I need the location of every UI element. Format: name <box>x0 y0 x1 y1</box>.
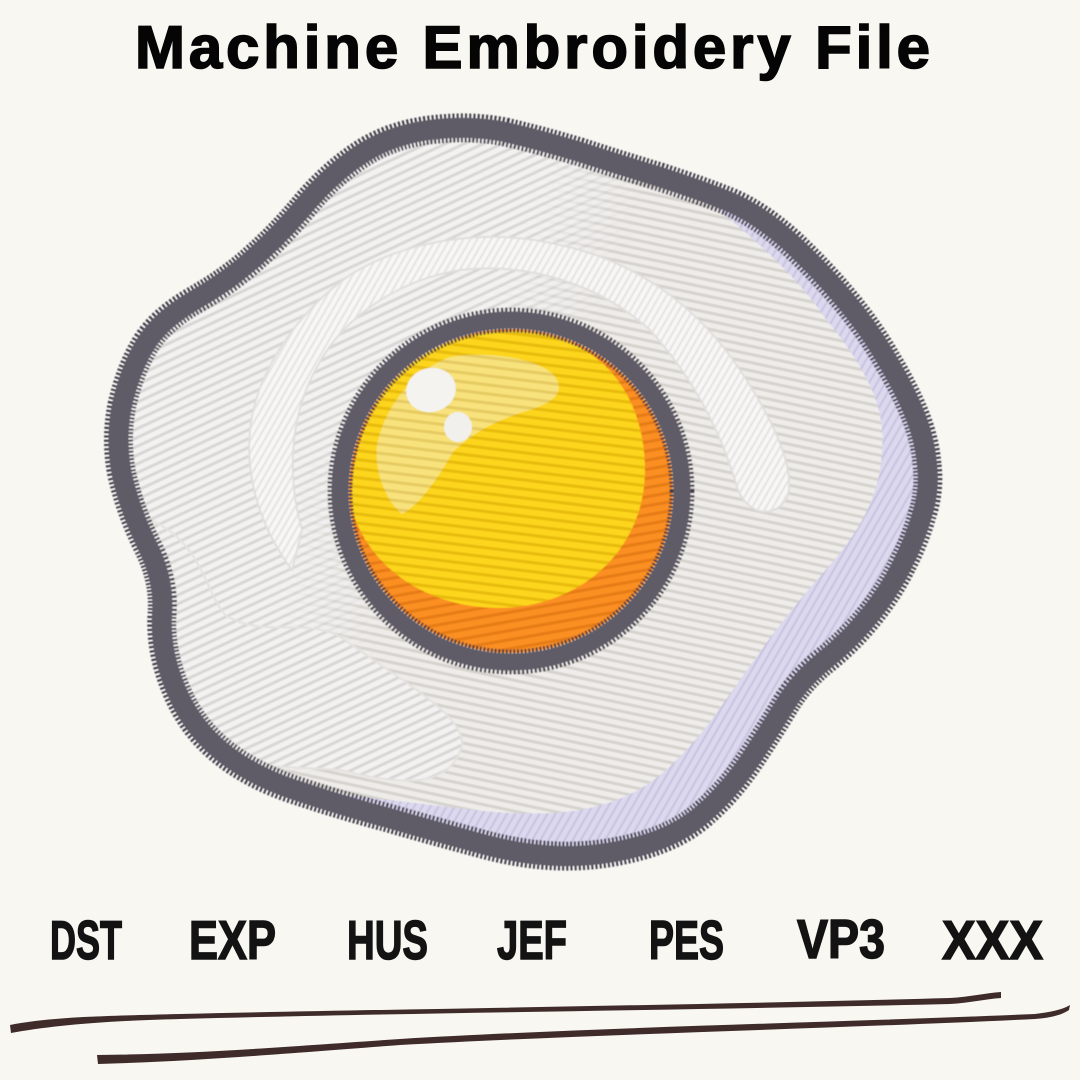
label: EXP: EXP <box>189 909 276 971</box>
ridge: lower left fold <box>150 520 462 781</box>
yolk: white shine large <box>401 362 461 418</box>
label: JEF: JEF <box>497 909 567 971</box>
ridge: arc around yolk <box>249 237 789 570</box>
illustration: embroidered fried egg <box>118 128 928 856</box>
yolk <box>340 320 682 662</box>
yolk: white shine small <box>444 412 472 442</box>
yolk: pale highlight <box>377 355 559 514</box>
label: PES: PES <box>649 909 724 971</box>
egg white <box>118 128 883 813</box>
yolk: yellow centre <box>351 331 645 608</box>
egg outline: stitched grey border <box>118 128 928 856</box>
underline stroke one <box>10 992 1001 1033</box>
yolk: stitched grey ring <box>340 320 682 662</box>
label: HUS: HUS <box>347 909 428 971</box>
underline stroke two <box>97 1005 1070 1064</box>
file format labels <box>50 908 1043 971</box>
label: XXX: XXX <box>942 909 1043 971</box>
yolk: orange shade <box>349 329 673 653</box>
title: Machine Embroidery File <box>135 14 930 81</box>
egg white: upper left stitching <box>128 138 612 771</box>
label: DST: DST <box>50 909 122 971</box>
egg shadow: lilac underlay <box>118 128 928 856</box>
label: VP3: VP3 <box>797 908 885 970</box>
